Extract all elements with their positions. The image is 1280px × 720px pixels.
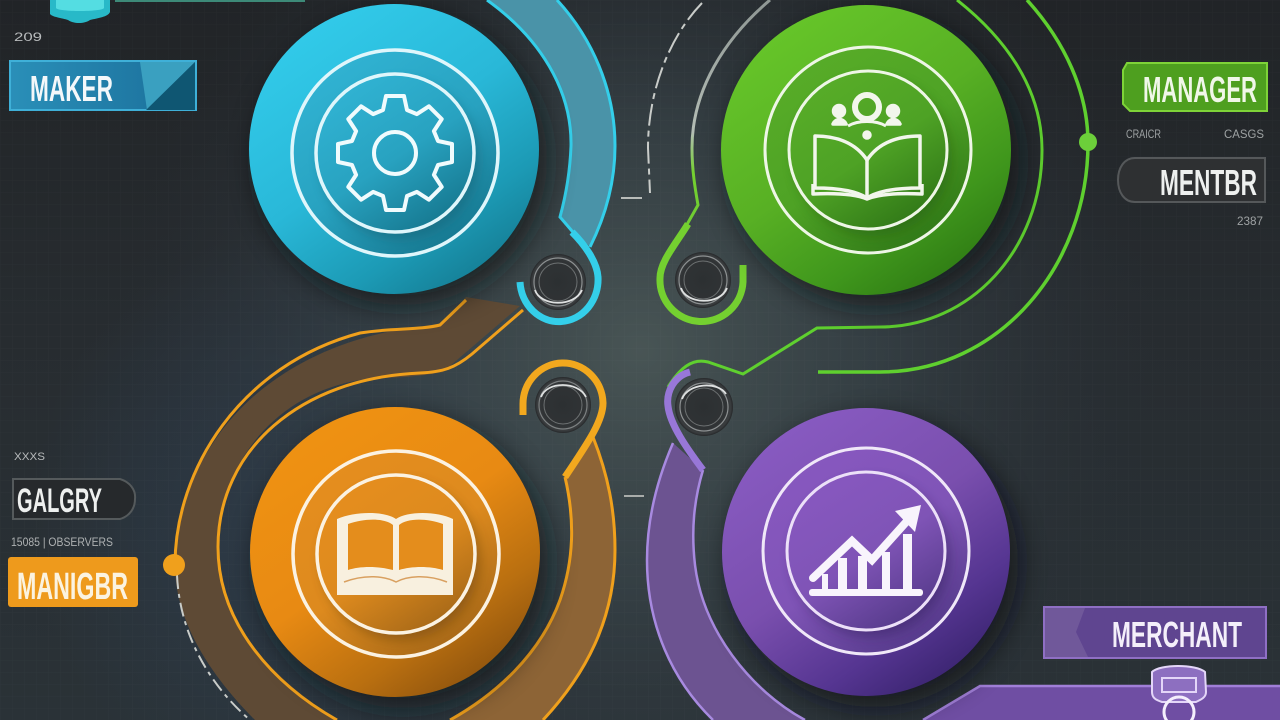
top edge line [115, 0, 305, 2]
icon: orange node dot [163, 554, 185, 576]
icon: gear [338, 96, 452, 210]
icon: open book [337, 513, 453, 595]
panel: maker connector band [487, 0, 615, 322]
panel: cyan gear circle [249, 4, 547, 305]
control knob: green [675, 252, 731, 308]
panel: merchant connector band [647, 372, 805, 720]
panel: orange manager connector band [450, 363, 644, 720]
panel: merchant bottom bar [923, 686, 1280, 720]
icon: open book with people [813, 95, 922, 199]
small text: left caption: XXXS [14, 451, 45, 463]
panel: galery connector band [163, 297, 523, 720]
label: mentor [1118, 158, 1265, 203]
icon: purple bottom badge [1152, 666, 1206, 720]
panel: purple chart circle [722, 408, 1018, 707]
icon: green node dot [1079, 133, 1097, 151]
panel: manager connector lines [621, 0, 1097, 387]
label: merchant [1044, 607, 1266, 658]
label: maker: MAKER [30, 68, 113, 109]
small text: green caption left: CRAICR [1126, 127, 1161, 141]
label: orange manager: MANIGBR [17, 566, 128, 608]
small text: green caption right: CASGS [1224, 127, 1264, 141]
panel: green book circle [721, 5, 1019, 306]
label: maker [10, 61, 196, 110]
control knob: orange [535, 377, 591, 433]
control knob: cyan [530, 254, 586, 310]
label: galery: GALGRY [17, 482, 102, 520]
small text: 209: 209 [14, 30, 42, 44]
panel: orange book circle [250, 407, 548, 708]
icon: rising chart [809, 505, 923, 596]
control knob: purple [675, 378, 733, 436]
small text: 2387: 2387 [1237, 214, 1263, 228]
icon: cyan top-left badge [50, 0, 110, 23]
label: orange manager [8, 557, 138, 608]
small text: galery caption: 15085 | OBSERVERS [11, 535, 113, 549]
label: manager green [1123, 63, 1267, 111]
